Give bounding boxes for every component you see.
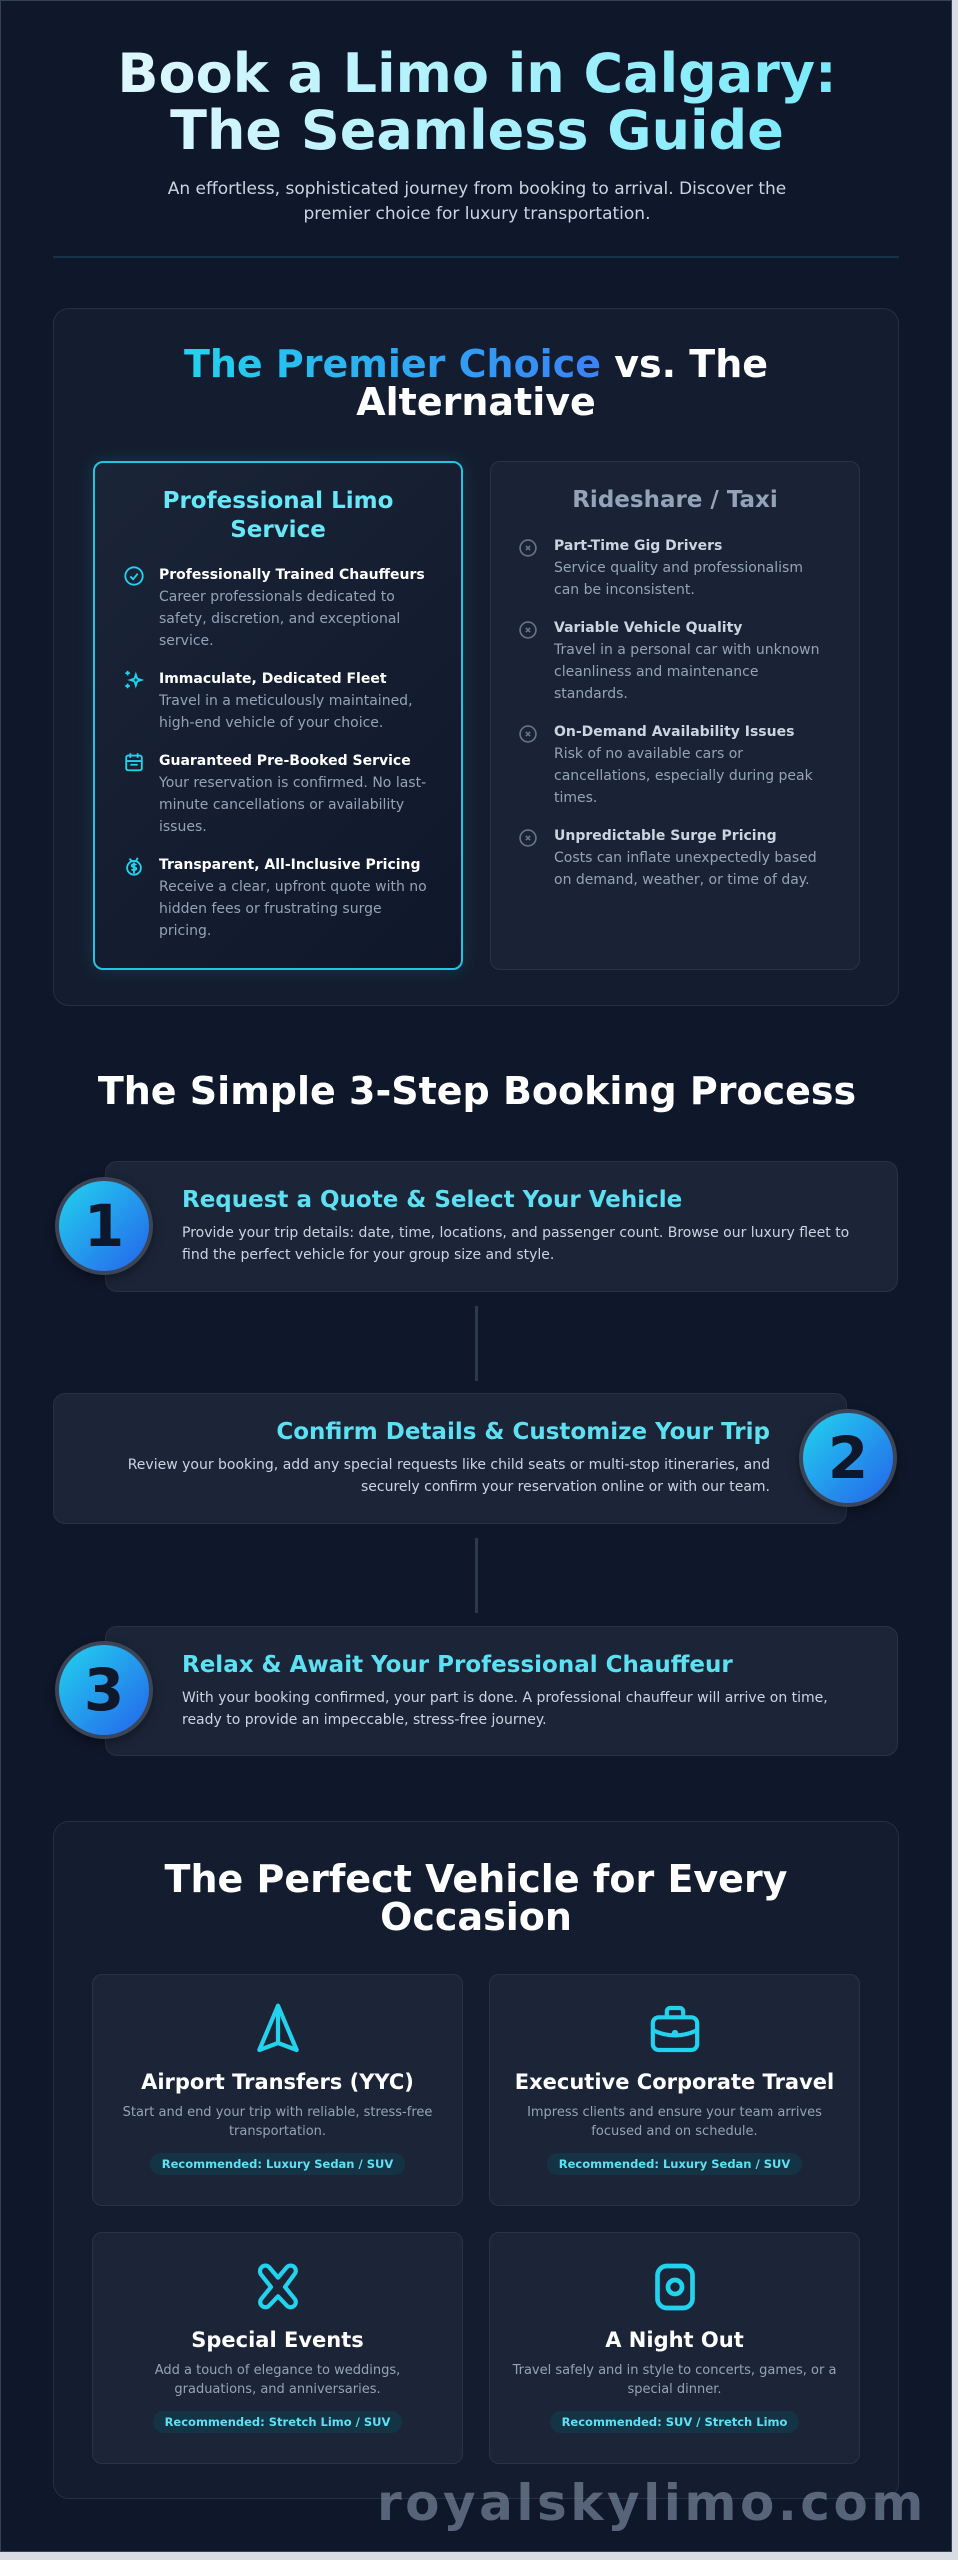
step 1 text: Provide your trip details: date, time, locations, and passenger count. Browse our luxury fleet to find the perfect vehicle for your group size and style. [182, 1225, 849, 1263]
item: trained chauffeurs [124, 566, 425, 649]
heading: vehicles [164, 1857, 787, 1939]
card: airport [92, 1974, 463, 2206]
badge: night out: Recommended: SUV / Stretch Limo [562, 2415, 787, 2429]
panel: vehicles [53, 1821, 899, 2499]
item: gig drivers [519, 538, 803, 598]
item: vehicle quality: Variable Vehicle Quality [554, 620, 742, 636]
item: gig drivers: Part-Time Gig Drivers [554, 538, 722, 554]
item: vehicle quality [519, 620, 819, 702]
step 2 text: Review your booking, add any special requests like child seats or multi-stop itineraries, and securely confirm your reservation online or with our team. [128, 1457, 770, 1495]
footer watermark: royalskylimo.com [377, 2474, 927, 2532]
item: fleet: Travel in a meticulously maintained, high-end vehicle of your choice. [159, 693, 413, 731]
subtitle: An effortless, sophisticated journey from booking to arrival. Discover the premier choice for luxury transportation. [168, 179, 786, 224]
badge: events: Recommended: Stretch Limo / SUV [165, 2415, 390, 2429]
step 1 [105, 1161, 898, 1292]
step 2 title: Confirm Details & Customize Your Trip [276, 1419, 770, 1445]
icon: briefcase [650, 2006, 700, 2052]
title: The Seamless Guide [170, 99, 784, 162]
item: pricing: Receive a clear, upfront quote with no hidden fees or frustrating surge pricing. [159, 879, 427, 939]
heading: vehicles: The Perfect Vehicle for Every [165, 1857, 787, 1901]
item: fleet: Immaculate, Dedicated Fleet [159, 671, 387, 687]
item: pricing: Transparent, All-Inclusive Pricing [159, 857, 421, 873]
card: events: Add a touch of elegance to weddings, graduations, and anniversaries. [155, 2363, 400, 2397]
item: surge: Costs can inflate unexpectedly based on demand, weather, or time of day. [554, 850, 817, 888]
item: surge [519, 828, 817, 888]
card: airport: Start and end your trip with reliable, stress-free transportation. [123, 2105, 432, 2139]
badge: step 1 [55, 1177, 153, 1275]
icon: night out [655, 2264, 695, 2310]
step 1 title: Request a Quote & Select Your Vehicle [182, 1187, 682, 1213]
step 3 [105, 1626, 898, 1756]
badge: corporate [547, 2153, 802, 2175]
heading: comparison: Alternative [356, 380, 596, 424]
badge: airport [150, 2153, 405, 2175]
item: vehicle quality: Travel in a personal car with unknown cleanliness and maintenance standards. [554, 642, 819, 702]
badge: airport: Recommended: Luxury Sedan / SUV [162, 2157, 393, 2171]
step 3 title: Relax & Await Your Professional Chauffeur [182, 1652, 733, 1678]
item: availability [519, 724, 813, 806]
badge: step 2 [799, 1409, 897, 1507]
item: gig drivers: Service quality and professionalism can be inconsistent. [554, 560, 803, 598]
card: professional limo [93, 461, 463, 970]
card title: rideshare: Rideshare / Taxi [572, 487, 778, 513]
icon: airport [257, 2004, 299, 2052]
item: fleet [125, 670, 413, 731]
card title: professional limo: Service [230, 517, 326, 543]
card: rideshare [490, 461, 860, 970]
heading: comparison: The Premier Choice vs. The [184, 342, 768, 386]
heading: comparison [184, 342, 768, 424]
item: surge: Unpredictable Surge Pricing [554, 828, 777, 844]
card: corporate [489, 1974, 860, 2206]
item: pre-booked [125, 753, 426, 835]
connector 1 [475, 1306, 478, 1381]
item: availability: Risk of no available cars or cancellations, especially during peak times. [554, 746, 813, 806]
card: night out [489, 2232, 860, 2464]
card: night out: Travel safely and in style to concerts, games, or a special dinner. [513, 2363, 836, 2397]
connector 2 [475, 1538, 478, 1613]
badge: events [153, 2411, 402, 2433]
item: pricing [126, 857, 427, 939]
badge: corporate: Recommended: Luxury Sedan / SUV [559, 2157, 790, 2171]
badge: step 3: 3 [84, 1656, 124, 1724]
title [1, 45, 953, 159]
card title: professional limo: Professional Limo [163, 488, 393, 514]
badge: step 1: 1 [84, 1192, 124, 1260]
step 3 text: With your booking confirmed, your part is done. A professional chauffeur will arrive on time, ready to provide an impeccable, stress-free journey. [182, 1690, 828, 1728]
card: events: Special Events [191, 2328, 364, 2352]
title: Book a Limo in Calgary: [117, 42, 837, 105]
card: events [92, 2232, 463, 2464]
item: pre-booked: Guaranteed Pre-Booked Service [159, 753, 411, 769]
panel: comparison [53, 308, 899, 1006]
item: availability: On-Demand Availability Issues [554, 724, 794, 740]
item: pre-booked: Your reservation is confirmed. No last-minute cancellations or availability issues. [159, 775, 426, 835]
card: corporate: Impress clients and ensure your team arrives focused and on schedule. [527, 2105, 822, 2139]
card title: professional limo [163, 488, 393, 543]
heading: vehicles: Occasion [380, 1895, 572, 1939]
badge: step 3 [55, 1641, 153, 1739]
icon: events [258, 2264, 298, 2310]
card: corporate: Executive Corporate Travel [515, 2070, 834, 2094]
badge: night out [550, 2411, 799, 2433]
badge: step 2: 2 [828, 1424, 868, 1492]
step 2 [53, 1393, 847, 1524]
item: trained chauffeurs: Career professionals dedicated to safety, discretion, and exceptional service. [159, 589, 400, 649]
card: night out: A Night Out [605, 2328, 744, 2352]
item: trained chauffeurs: Professionally Trained Chauffeurs [159, 567, 425, 583]
card: airport: Airport Transfers (YYC) [141, 2070, 414, 2094]
heading: steps: The Simple 3-Step Booking Process [98, 1069, 856, 1113]
